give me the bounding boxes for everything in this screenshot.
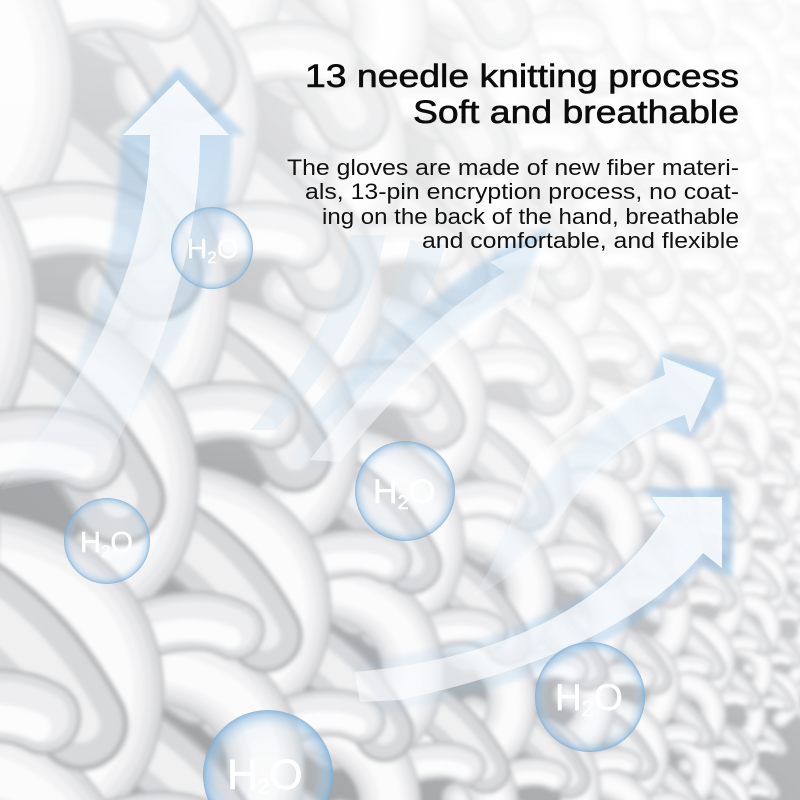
- water bubble: top left: H: [187, 233, 207, 264]
- water bubble: lower right: O: [594, 677, 623, 718]
- arrow: large upward airflow arrow: [0, 66, 246, 490]
- water bubble: top left: O: [217, 233, 238, 264]
- water bubble: centre: H: [373, 473, 398, 511]
- water bubble: left: 2: [101, 542, 110, 561]
- description text: The gloves are made of new fiber materi-: [287, 155, 739, 180]
- water bubble: centre: 2: [398, 492, 409, 514]
- title: Soft and breathable: [413, 94, 739, 130]
- description text: [287, 155, 739, 253]
- arrow: middle airflow arrow toward upper right: [250, 228, 548, 470]
- water bubble: left: O: [110, 527, 133, 559]
- water bubble: lower right: [535, 642, 645, 752]
- water bubble: centre: O: [409, 473, 435, 511]
- water bubble: left: [64, 498, 150, 584]
- title: [305, 58, 739, 130]
- arrow: upper right airflow arrow: [470, 352, 726, 600]
- water bubble: centre: [355, 441, 455, 541]
- arrow: lower right airflow arrow: [350, 488, 732, 715]
- water bubble: lower right: H: [555, 677, 582, 718]
- water bubble: bottom: [203, 710, 333, 800]
- description text: ing on the back of the hand, breathable: [322, 204, 739, 229]
- description text: als, 13-pin encryption process, no coat-: [305, 179, 739, 204]
- water bubble: bottom: H: [227, 751, 258, 799]
- description text: and comfortable, and flexible: [422, 228, 739, 253]
- water bubble: bottom: 2: [258, 776, 269, 798]
- water bubble: top left: 2: [207, 248, 217, 267]
- water bubble: lower right: 2: [582, 696, 594, 721]
- water bubble: bottom: O: [269, 751, 303, 799]
- title: 13 needle knitting process: [305, 58, 739, 94]
- water bubble: top left: [171, 207, 253, 289]
- water bubble: left: H: [80, 527, 101, 559]
